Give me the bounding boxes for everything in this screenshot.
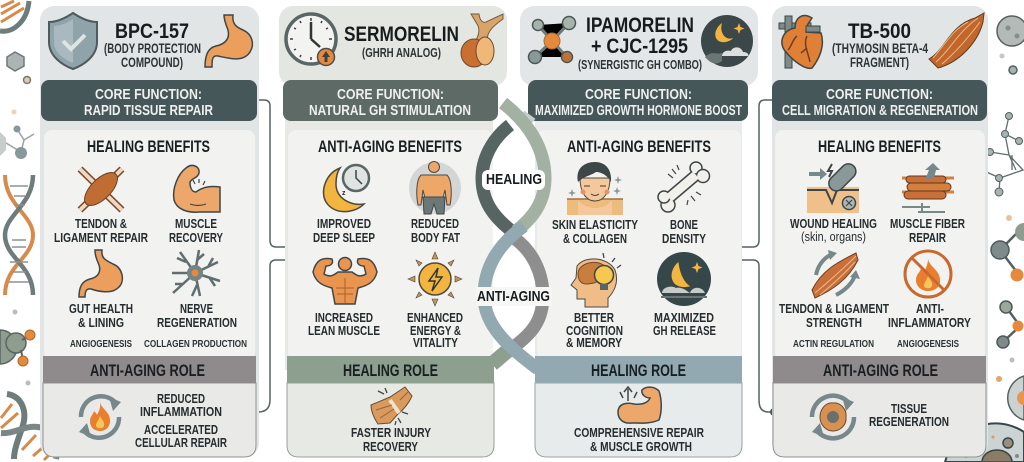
panel background — [279, 6, 507, 86]
role text — [869, 401, 949, 429]
benefit: maximized GH release: MAXIMIZED — [654, 310, 714, 325]
role text: RECOVERY — [363, 439, 418, 454]
benefit: increased lean muscle: LEAN MUSCLE — [308, 323, 380, 338]
benefit: reduced body fat: BODY FAT — [411, 230, 460, 245]
strand connector to Ipamorelin core — [522, 114, 533, 122]
benefit: tendon and ligament strength: STRENGTH — [806, 315, 862, 330]
role text: REGENERATION — [869, 414, 949, 429]
grey anti-aging strand — [512, 238, 543, 348]
icon: muscle — [929, 13, 984, 68]
label: Anti-Aging: ANTI-AGING — [477, 288, 550, 305]
heading — [832, 19, 928, 70]
benefit: wound healing: (skin, organs) — [801, 229, 866, 244]
icon: molecule — [528, 16, 576, 64]
icon: cell with cycle arrows — [812, 396, 854, 438]
benefit: better cognition: COGNITION — [566, 323, 623, 338]
benefit: anti-inflammatory: ANTI- — [916, 301, 944, 316]
role text: TISSUE — [891, 401, 927, 416]
icon: no inflammation — [905, 251, 951, 297]
benefit: improved deep sleep: IMPROVED — [317, 216, 371, 231]
role card — [773, 383, 986, 457]
benefit: muscle fiber repair: REPAIR — [909, 230, 946, 245]
minor benefits: ACTIN REGULATION — [793, 338, 874, 350]
background decoration: left — [0, 1, 57, 460]
role text: & MUSCLE GROWTH — [590, 439, 692, 454]
benefit: improved deep sleep — [313, 216, 375, 245]
icon: neuron — [172, 250, 220, 296]
benefits heading: HEALING BENEFITS — [87, 137, 210, 156]
label: Healing: HEALING — [486, 171, 542, 188]
role bar: ANTI-AGING ROLE — [823, 361, 938, 380]
benefit: anti-inflammatory — [888, 301, 971, 330]
heading — [344, 22, 459, 60]
background decoration: right — [945, 16, 1024, 462]
icon: head with brain and bulb — [571, 253, 621, 307]
core function bar — [528, 80, 748, 121]
icon: wound and bandage — [807, 161, 859, 213]
panel background — [40, 6, 259, 457]
heading: TB-500 — [848, 19, 911, 43]
core function bar: CORE FUNCTION: — [826, 87, 933, 103]
role bar: HEALING ROLE — [591, 361, 686, 380]
benefit: nerve regeneration — [157, 301, 237, 330]
benefits heading: HEALING BENEFITS — [818, 137, 941, 156]
heading: SERMORELIN — [344, 22, 459, 46]
role bar — [535, 356, 742, 383]
icon: heart — [779, 16, 822, 68]
benefits card — [44, 130, 255, 360]
benefit: muscle fiber repair — [890, 216, 965, 245]
role text: CELLULAR REPAIR — [135, 435, 227, 450]
heading: (THYMOSIN BETA-4 — [832, 41, 928, 56]
role text: INFLAMMATION — [140, 404, 222, 419]
icon: muscle fibers — [902, 163, 954, 213]
benefit: maximized GH release — [653, 310, 716, 338]
icon: stomach — [205, 15, 252, 67]
role card — [535, 383, 742, 457]
benefit: reduced body fat — [411, 216, 460, 245]
benefit: enhanced energy and vitality: ENERGY & — [410, 323, 461, 338]
heading: FRAGMENT) — [850, 55, 909, 70]
benefit: tendon and ligament strength — [779, 301, 889, 330]
benefit: muscle recovery: RECOVERY — [169, 230, 223, 245]
core function bar — [41, 80, 257, 121]
panel background — [772, 6, 988, 457]
icon: sun with lightning — [408, 252, 462, 306]
icon: flexed arm — [174, 166, 220, 212]
core function bar: NATURAL GH STIMULATION — [309, 103, 471, 119]
role bar — [43, 356, 256, 383]
heading: (GHRH ANALOG) — [362, 46, 441, 60]
minor benefits: COLLAGEN PRODUCTION — [144, 338, 247, 350]
heading: + CJC-1295 — [591, 34, 688, 58]
icon: torso — [409, 162, 461, 214]
benefit: better cognition — [566, 310, 623, 350]
minor benefits: ANGIOGENESIS — [70, 338, 132, 350]
panel: Sermorelin — [279, 6, 507, 457]
role text — [135, 391, 227, 450]
role bar — [773, 356, 986, 383]
role text: ACCELERATED — [144, 422, 218, 437]
icon: moon and clock: z — [342, 190, 346, 197]
role text — [574, 425, 704, 454]
benefit: enhanced energy and vitality: ENHANCED — [407, 310, 463, 325]
core function bar: RAPID TISSUE REPAIR — [84, 103, 213, 119]
role text: REDUCED — [157, 391, 205, 406]
benefit: wound healing — [790, 216, 877, 244]
benefits card — [775, 130, 985, 360]
icon: face and skin — [567, 162, 623, 215]
icon: flame with cycle arrows — [79, 396, 121, 438]
benefit: gut health: GUT HEALTH — [69, 301, 133, 316]
icon: moon and clock — [324, 165, 369, 212]
benefit: muscle fiber repair: MUSCLE FIBER — [890, 216, 965, 231]
heading: BPC-157 — [115, 19, 189, 43]
icon: fiber bundle — [371, 387, 412, 425]
benefit: muscle recovery — [169, 216, 223, 245]
icon: tendon strength — [812, 250, 860, 298]
benefit: bone density — [662, 217, 706, 246]
minor benefits — [793, 338, 959, 350]
core function bar: MAXIMIZED GROWTH HORMONE BOOST — [535, 103, 742, 119]
benefit: muscle recovery: MUSCLE — [175, 216, 217, 231]
benefit: enhanced energy and vitality — [407, 310, 463, 350]
icon: muscular torso — [313, 258, 377, 304]
benefit: skin elasticity — [552, 217, 638, 246]
icon: clock — [286, 14, 336, 66]
benefits heading: ANTI-AGING BENEFITS — [567, 137, 711, 156]
benefit: tendon and ligament repair — [54, 216, 148, 245]
icon: tendon — [79, 167, 123, 211]
benefit: increased lean muscle: INCREASED — [315, 310, 373, 325]
icon: bone — [658, 162, 710, 212]
icon: shield — [49, 13, 97, 69]
panel: TB-500 — [772, 6, 988, 457]
benefit: tendon and ligament strength: TENDON & LIGAMENT — [779, 301, 889, 316]
heading: COMPOUND) — [121, 55, 183, 70]
benefit: bone density: BONE — [670, 217, 698, 232]
benefit: tendon and ligament repair: TENDON & — [75, 216, 127, 231]
benefit: enhanced energy and vitality: VITALITY — [413, 335, 458, 350]
dark healing strand — [482, 125, 513, 232]
icon: moon night — [657, 252, 711, 306]
role text — [351, 425, 431, 454]
core function bar — [772, 80, 987, 121]
heading — [104, 19, 201, 70]
benefit: skin elasticity: SKIN ELASTICITY — [552, 217, 638, 232]
connector lines between panels — [250, 100, 778, 416]
role bar: HEALING ROLE — [343, 361, 438, 380]
benefits card — [288, 130, 493, 360]
icon: pituitary gland — [461, 14, 503, 67]
benefit: wound healing: WOUND HEALING — [790, 216, 877, 231]
panel: Ipamorelin + CJC-1295 — [520, 6, 758, 457]
benefit: gut health — [69, 301, 133, 330]
benefit: tendon and ligament repair: LIGAMENT REPAIR — [54, 230, 148, 245]
heading — [578, 13, 702, 72]
benefit: bone density: DENSITY — [662, 231, 706, 246]
core function bar — [283, 80, 498, 121]
green strand to Sermorelin bar — [492, 347, 512, 364]
benefit: better cognition: BETTER — [574, 310, 614, 325]
role text: FASTER INJURY — [351, 425, 431, 440]
minor benefits — [70, 338, 247, 350]
role text: COMPREHENSIVE REPAIR — [574, 425, 704, 440]
core function bar: CORE FUNCTION: — [337, 87, 444, 103]
role bar: ANTI-AGING ROLE — [90, 361, 205, 380]
core function bar: CORE FUNCTION: — [95, 87, 202, 103]
benefit: maximized GH release: GH RELEASE — [653, 323, 716, 338]
benefit: increased lean muscle — [308, 310, 380, 338]
benefit: nerve regeneration: NERVE — [180, 301, 213, 316]
central double helix — [482, 103, 545, 369]
core function bar: CORE FUNCTION: — [585, 87, 692, 103]
benefit: skin elasticity: & COLLAGEN — [563, 231, 627, 246]
heading: IPAMORELIN — [586, 13, 694, 37]
role bar — [287, 356, 494, 383]
benefit: reduced body fat: REDUCED — [411, 216, 459, 231]
panel background — [520, 6, 758, 86]
green strand — [503, 103, 545, 231]
heading: (SYNERGISTIC GH COMBO) — [578, 58, 702, 72]
benefits heading: ANTI-AGING BENEFITS — [318, 137, 462, 156]
blue strand — [484, 226, 538, 369]
role card — [287, 383, 494, 457]
heading: (BODY PROTECTION — [104, 41, 201, 56]
benefit: anti-inflammatory: INFLAMMATORY — [888, 315, 971, 330]
panel: BPC-157 — [40, 6, 259, 457]
icon: night sky — [701, 15, 753, 67]
minor benefits: ANGIOGENESIS — [897, 338, 959, 350]
benefit: improved deep sleep: DEEP SLEEP — [313, 230, 375, 245]
icon: gut — [79, 250, 122, 297]
role card — [43, 383, 256, 457]
benefit: nerve regeneration: REGENERATION — [157, 315, 237, 330]
icon: flexed arm with arrow — [618, 387, 661, 423]
benefits card — [537, 130, 741, 360]
benefit: gut health: & LINING — [78, 315, 124, 330]
benefit: better cognition: & MEMORY — [566, 335, 622, 350]
